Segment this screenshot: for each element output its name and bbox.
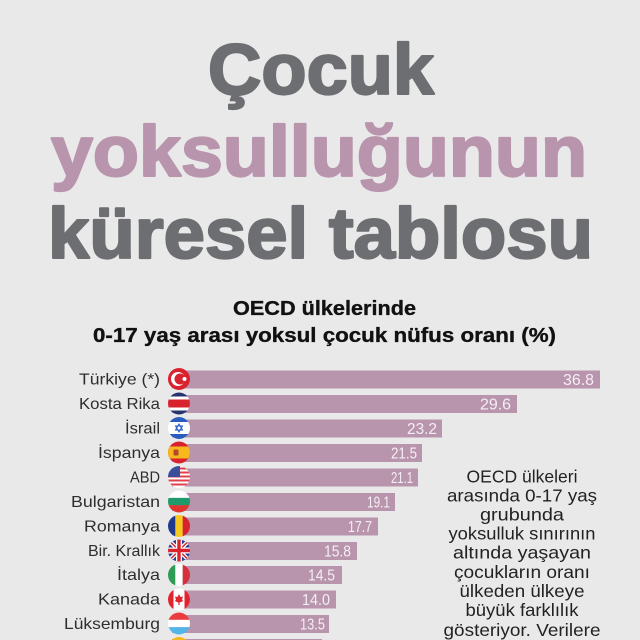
title: küresel tablosu	[48, 195, 593, 274]
row: Kosta Rika: 29.6	[480, 396, 511, 414]
text block: explanation: grubunda	[480, 504, 564, 524]
text block: explanation: yoksulluk sınırının	[448, 524, 596, 544]
text block: explanation: gösteriyor. Verilere	[444, 620, 600, 640]
row: Bulgaristan: 19.1	[367, 494, 390, 512]
text block: explanation: çocukların oranı	[454, 562, 590, 582]
row: Kanada: 14.0	[302, 592, 330, 609]
row: Lüksemburg: 13.5	[300, 616, 325, 634]
title: Çocuk	[208, 31, 435, 110]
row: İtalya: 14.5	[308, 568, 335, 584]
row: İspanya: İspanya	[98, 443, 160, 462]
row: Lüksemburg: Lüksemburg	[64, 616, 160, 633]
row: Kosta Rika: Kosta Rika	[79, 396, 160, 413]
row: İtalya: İtalya	[117, 565, 160, 584]
chart subtitle: OECD ülkelerinde	[233, 298, 416, 320]
row: Bir. Krallık	[88, 540, 357, 562]
row: Romanya	[84, 515, 378, 537]
row: Bulgaristan: Bulgaristan	[71, 494, 160, 511]
text block: explanation: büyük farklılık	[466, 600, 579, 620]
row: İsrail: 23.2	[407, 421, 437, 438]
row: Kosta Rika	[79, 392, 517, 414]
row: Türkiye	[79, 368, 600, 390]
title	[48, 31, 593, 274]
row: Bulgaristan	[71, 490, 395, 513]
text block: explanation: ülkeden ülkeye	[460, 581, 584, 601]
row: Bir. Krallık: Bir. Krallık	[88, 543, 161, 560]
text block: explanation	[444, 466, 600, 640]
row: ABD: 21.1	[391, 470, 413, 487]
row: Türkiye: Türkiye (*)	[79, 372, 160, 388]
title: yoksulluğunun	[51, 113, 587, 192]
row: Lüksemburg	[64, 612, 329, 635]
row: Kanada: Kanada	[98, 592, 160, 608]
row: ABD	[130, 466, 418, 488]
row: next country, cropped	[168, 637, 322, 640]
text block: explanation: altında yaşayan	[453, 542, 591, 562]
row: Kanada	[98, 588, 336, 610]
row: Romanya: 17.7	[348, 519, 372, 536]
row: İspanya	[98, 442, 422, 464]
bar chart	[64, 368, 600, 640]
row: İsrail: İsrail	[125, 418, 160, 438]
chart subtitle: 0-17 yaş arası yoksul çocuk nüfus oranı (%)	[93, 325, 556, 347]
row: Bir. Krallık: 15.8	[324, 544, 351, 560]
text block: explanation: arasında 0-17 yaş	[447, 486, 597, 506]
row: ABD: ABD	[130, 470, 160, 486]
row: İspanya: 21.5	[391, 446, 417, 462]
row: Romanya: Romanya	[84, 518, 160, 536]
text block: explanation: OECD ülkeleri	[466, 466, 578, 486]
chart subtitle	[93, 298, 556, 347]
row: İtalya	[117, 564, 342, 586]
row: İsrail	[125, 417, 442, 439]
row: Türkiye: 36.8	[563, 372, 594, 389]
